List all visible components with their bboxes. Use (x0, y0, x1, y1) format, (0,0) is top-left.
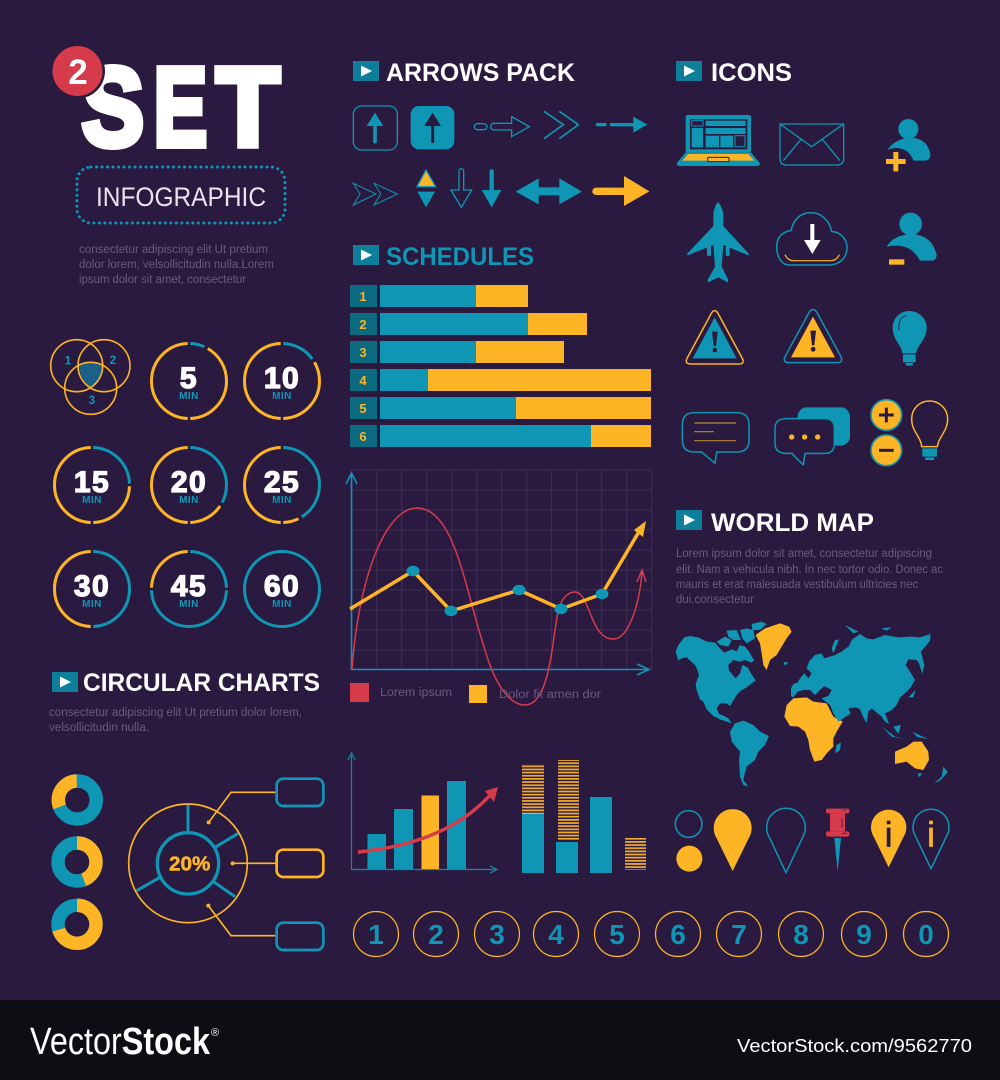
clock: 20 min: MIN (179, 495, 199, 506)
bar row 6: 6 (359, 429, 367, 444)
number badges 1 to 0: 7 (731, 919, 747, 950)
icon: plus button (871, 400, 902, 430)
number badges 1 to 0: 0 (918, 919, 934, 950)
continent: eurasia (791, 634, 931, 724)
clock: 60 min: MIN (272, 599, 292, 610)
bar row 5 (350, 397, 651, 419)
arrows pack icons (353, 106, 649, 207)
clock: 45 min (152, 552, 226, 626)
venn diagram: 3 (89, 395, 95, 407)
icon: light bulb outline (912, 401, 948, 460)
continent: australia (895, 742, 929, 770)
chart legend (350, 683, 601, 703)
watermark footer (0, 1000, 1000, 1080)
heading: schedules: SCHEDULES (386, 243, 534, 271)
bar row 3 (350, 341, 564, 363)
continent: south america (730, 721, 769, 787)
heading: circular charts: CIRCULAR CHARTS (83, 669, 320, 697)
map pins (675, 808, 949, 873)
badge: number 2: 2 (68, 53, 88, 92)
arrow: yellow right (592, 176, 649, 206)
pin: circle solid (676, 846, 702, 872)
heading: world map: WORLD MAP (711, 509, 874, 537)
clock: 10 min: 10 (264, 362, 300, 395)
watermark footer: ® (211, 1027, 219, 1039)
schedule bars (350, 285, 651, 447)
number badges 1 to 0 (354, 912, 948, 956)
intro text (79, 244, 274, 286)
clock: 15 min: MIN (82, 495, 102, 506)
chart legend: Lorem ipsum (380, 687, 452, 699)
clock: 10 min (244, 344, 320, 418)
clock: 5 min: MIN (179, 391, 199, 402)
subtitle box: INFOGRAPHIC (77, 167, 285, 223)
asia islands (783, 625, 928, 739)
icon: minus button (871, 435, 902, 466)
number badges 1 to 0: 3 (489, 919, 505, 950)
continent: greenland (756, 623, 792, 670)
continent: north america (676, 636, 756, 723)
icon: remove user (887, 213, 937, 265)
arctic islands (717, 622, 767, 647)
world map text: Lorem ipsum dolor sit amet, consectetur adipiscing (676, 548, 932, 560)
world map text: elit. Nam a vehicula nibh. In nec tortor odio. Donec ac (676, 564, 943, 576)
circular charts text: velsollicitudin nulla. (49, 722, 149, 734)
venn diagram (51, 340, 130, 414)
bar row 2: 2 (359, 317, 367, 332)
clock: 20 min: 20 (171, 466, 207, 499)
heading: icons: ICONS (711, 59, 792, 87)
icon: speech bubble lines (682, 413, 749, 463)
arrow: up down toggle (417, 170, 436, 207)
intro text: dolor lorem, velsollicitudin nulla.Lorem (79, 259, 274, 271)
pin: info outline: i (927, 816, 935, 855)
heading: arrows pack: ARROWS PACK (386, 59, 575, 87)
bar row 3: 3 (359, 345, 367, 360)
arrow: outlined square up (353, 106, 397, 150)
clock: 60 min: 60 (264, 570, 300, 603)
bar row 2 (350, 313, 587, 335)
arrow: dashed solid right (597, 117, 647, 133)
number badges 1 to 0: 9 (856, 919, 872, 950)
number badges 1 to 0: 1 (368, 919, 384, 950)
clock: 30 min: 30 (74, 570, 110, 603)
new zealand and tasmania (918, 767, 948, 783)
continent: africa (784, 697, 843, 762)
icon: cloud download (777, 213, 847, 265)
world map (676, 622, 948, 787)
arrow: outlined down (451, 169, 472, 207)
arrow: double chevron (544, 111, 578, 139)
bar row 1 (350, 285, 528, 307)
chart legend: Dolor fit amen dor (499, 689, 601, 701)
subtitle box: INFOGRAPHIC: INFOGRAPHIC (96, 182, 266, 212)
pin: info solid (871, 810, 906, 867)
bar row 5: 5 (359, 401, 367, 416)
arrow: double headed (516, 178, 582, 204)
pin: circle outline (675, 811, 702, 837)
icon: warning blue (686, 311, 743, 364)
clock: 15 min (54, 448, 130, 522)
bar row 4 (350, 369, 651, 391)
intro text: ipsum dolor sit amet, consectetur (79, 274, 246, 286)
icon: light bulb filled (893, 311, 927, 366)
line chart (346, 470, 652, 705)
title: SET: E (154, 46, 207, 170)
icon: envelope (780, 124, 844, 165)
clock: 45 min: MIN (179, 599, 199, 610)
donut chart 1 (58, 781, 96, 819)
pin: info outline (913, 809, 949, 869)
icon: warning yellow (784, 309, 842, 363)
icon: add user (886, 119, 930, 171)
heading: icons (676, 59, 792, 87)
clock: 25 min: 25 (264, 466, 300, 499)
venn diagram: 1 (65, 356, 72, 368)
icon: laptop (677, 115, 760, 166)
radial diagram 20% (129, 779, 323, 950)
circular charts text (49, 707, 302, 734)
arrow: solid down (482, 171, 501, 207)
watermark footer: VectorStock (30, 1021, 211, 1063)
clock: 15 min: 15 (74, 466, 110, 499)
number badges 1 to 0: 6 (670, 919, 686, 950)
icon: airplane (687, 202, 749, 282)
donut chart 3 (58, 905, 96, 943)
clock: 60 min (244, 552, 320, 626)
clock: 5 min (152, 344, 226, 418)
radial diagram 20%: 20% (169, 853, 210, 876)
number badges 1 to 0: 5 (609, 919, 625, 950)
title: SET: T (216, 46, 280, 170)
world map text: mauris et erat malesuada vestibulum ultricies nec (676, 579, 918, 591)
number badges 1 to 0: 8 (793, 919, 809, 950)
icon: speech bubbles dots (775, 407, 850, 465)
donut chart 2 (58, 843, 96, 881)
intro text: consectetur adipiscing elit Ut pretium (79, 244, 268, 256)
pin: push pin (826, 809, 849, 872)
title: SET: S (82, 46, 144, 170)
stacked bar chart (522, 760, 646, 873)
number badges 1 to 0: 2 (428, 919, 444, 950)
bar row 4: 4 (359, 373, 367, 388)
arrow: double outline heads (353, 183, 397, 205)
clock: 30 min: MIN (82, 599, 102, 610)
bar row 6 (350, 425, 651, 447)
clock: 10 min: MIN (272, 391, 292, 402)
bar row 1: 1 (359, 289, 367, 304)
number badges 1 to 0: 4 (548, 919, 564, 950)
arrow: dashed outline right (474, 117, 529, 137)
clock: 25 min: MIN (272, 495, 292, 506)
world map text (676, 548, 943, 606)
world map text: dui.consectetur (676, 594, 754, 606)
clock: 5 min: 5 (180, 362, 198, 395)
pin: solid drop (714, 809, 752, 871)
bar chart with growth arrow (348, 753, 498, 873)
venn diagram: 2 (110, 355, 116, 367)
pin: outline drop (767, 808, 805, 873)
circular charts text: consectetur adipiscing elit Ut pretium dolor lorem, (49, 707, 302, 719)
clock: 20 min (152, 448, 226, 522)
title: SET (50, 44, 280, 170)
clock: 25 min (244, 448, 320, 522)
icons grid (677, 115, 948, 466)
madagascar (835, 742, 841, 753)
watermark footer: VectorStock.com/9562770 (737, 1036, 972, 1056)
arrow: filled square up (411, 106, 454, 149)
pin: info solid: i (885, 816, 893, 855)
clock: 30 min (54, 552, 130, 626)
badge: number 2 (50, 44, 105, 98)
clock: 45 min: 45 (171, 570, 207, 603)
